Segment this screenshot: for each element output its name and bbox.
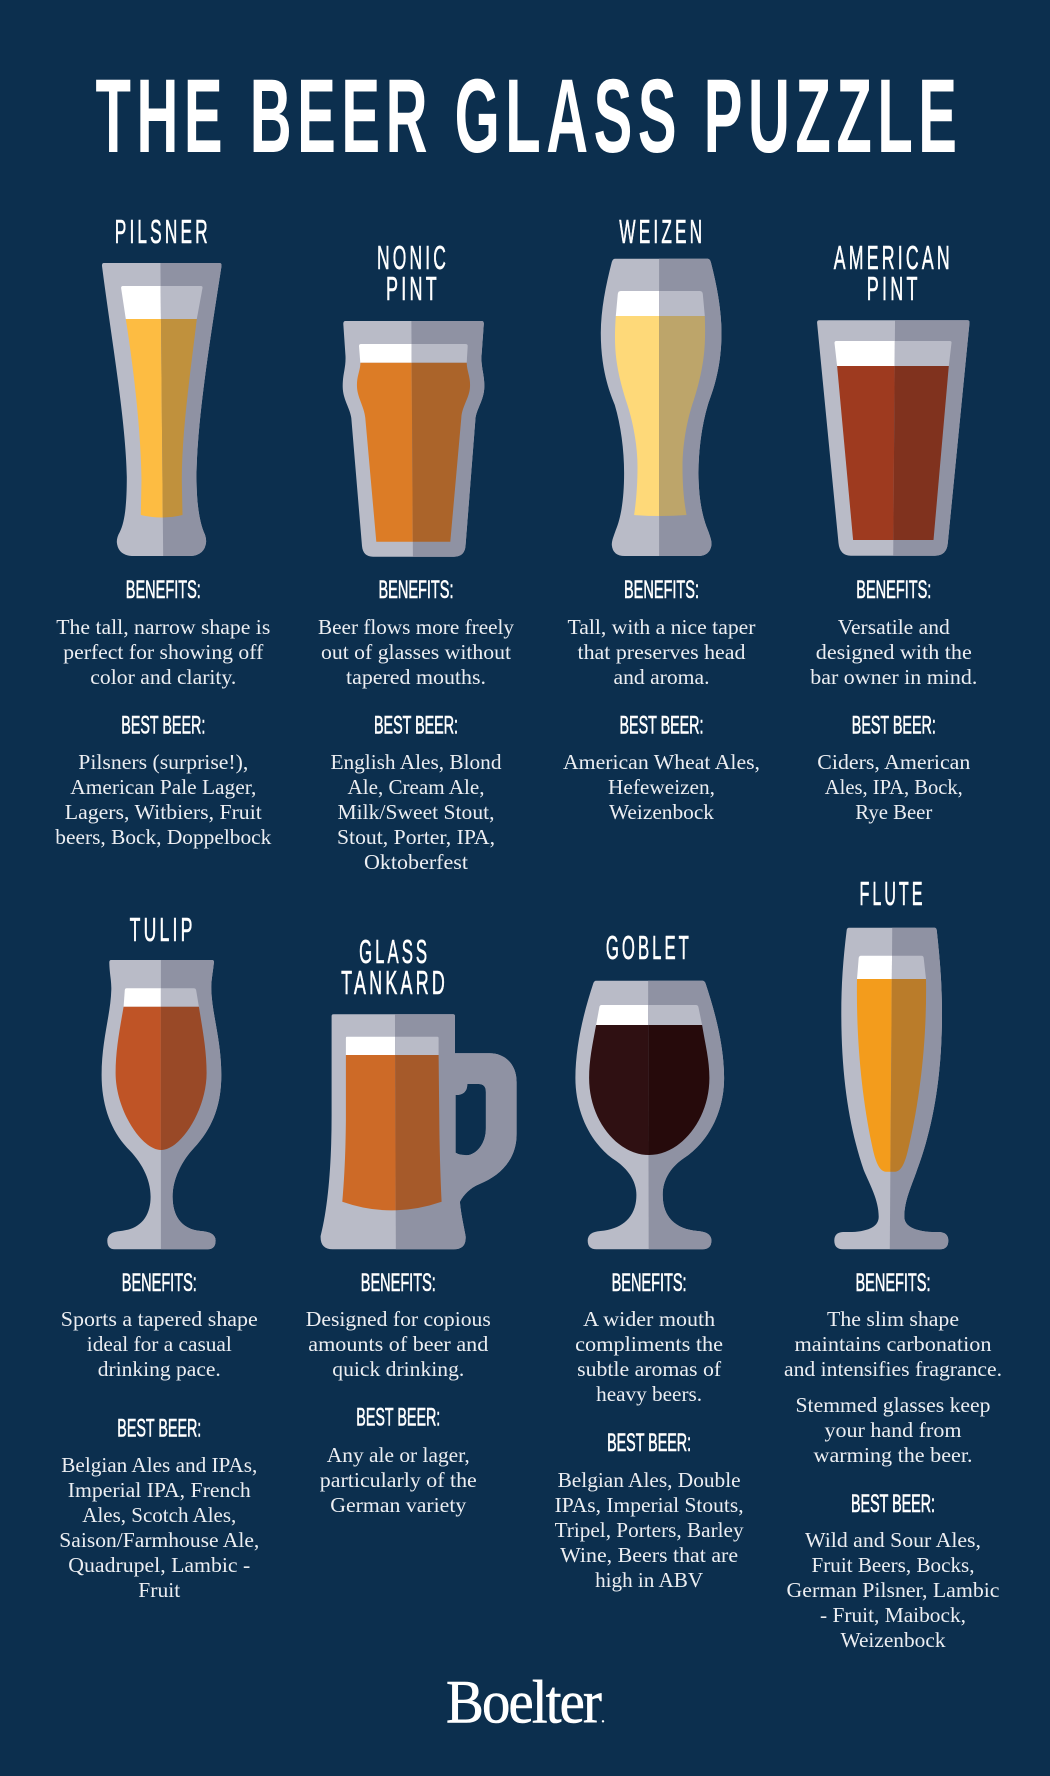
- benefits text: tulip: [61, 1307, 258, 1381]
- best beer text: goblet: [555, 1468, 744, 1592]
- benefits text: flute: maintains carbonation: [794, 1332, 992, 1356]
- benefits label: weizen: BENEFITS:: [624, 576, 699, 604]
- icon: goblet glass: [575, 981, 724, 1249]
- heading: tulip: TULIP: [130, 911, 196, 948]
- benefits text: weizen: Tall, with a nice taper: [568, 615, 756, 639]
- panel: glass tankard: [306, 933, 517, 1517]
- best beer text: american pint: Rye Beer: [855, 800, 932, 824]
- benefits text: flute: [784, 1307, 1002, 1467]
- best beer text: american pint: [817, 750, 971, 824]
- best beer text: pilsner: beers, Bock, Doppelbock: [55, 825, 272, 849]
- heading: american pint: AMERICAN: [834, 239, 953, 276]
- best beer text: nonic pint: Milk/Sweet Stout,: [338, 800, 494, 824]
- best beer text: pilsner: American Pale Lager,: [70, 775, 256, 799]
- best beer text: tulip: Ales, Scotch Ales,: [82, 1503, 236, 1527]
- benefits text: nonic pint: [318, 615, 515, 689]
- best beer text: tulip: Fruit: [138, 1578, 180, 1602]
- panel: tulip: [59, 911, 259, 1602]
- best beer text: flute: German Pilsner, Lambic: [786, 1578, 1000, 1602]
- benefits text: american pint: [810, 615, 977, 689]
- heading: american pint: [834, 239, 953, 307]
- benefits text: pilsner: The tall, narrow shape is: [56, 615, 270, 639]
- icon: tulip glass: [102, 960, 221, 1249]
- best beer text: nonic pint: Stout, Porter, IPA,: [337, 825, 495, 849]
- heading: glass tankard: TANKARD: [341, 964, 448, 1001]
- panel: flute: [784, 875, 1002, 1652]
- best beer label: glass tankard: BEST BEER:: [356, 1404, 440, 1432]
- best beer text: goblet: IPAs, Imperial Stouts,: [555, 1493, 744, 1517]
- benefits text: weizen: that preserves head: [578, 640, 746, 664]
- icon: american pint glass: [817, 320, 970, 556]
- benefits text: american pint: bar owner in mind.: [810, 665, 977, 689]
- icon: glass tankard: [321, 1014, 517, 1249]
- best beer text: goblet: Wine, Beers that are: [560, 1543, 738, 1567]
- benefits text: glass tankard: amounts of beer and: [308, 1332, 489, 1356]
- benefits text: glass tankard: quick drinking.: [332, 1357, 464, 1381]
- best beer label: flute: BEST BEER:: [851, 1490, 935, 1518]
- benefits text: goblet: [575, 1307, 723, 1406]
- best beer text: tulip: Saison/Farmhouse Ale,: [59, 1528, 259, 1552]
- benefits text: goblet: A wider mouth: [583, 1307, 716, 1331]
- benefits text: flute: warming the beer.: [814, 1443, 972, 1467]
- heading: nonic pint: [377, 239, 449, 307]
- heading: nonic pint: NONIC: [377, 239, 449, 276]
- benefits text: tulip: Sports a tapered shape: [61, 1307, 258, 1331]
- benefits text: nonic pint: Beer flows more freely: [318, 615, 515, 639]
- benefits label: tulip: BENEFITS:: [122, 1269, 197, 1297]
- panel: weizen: [563, 213, 760, 824]
- best beer text: goblet: Belgian Ales, Double: [558, 1468, 741, 1492]
- best beer text: weizen: Weizenbock: [609, 800, 714, 824]
- best beer text: weizen: American Wheat Ales,: [563, 750, 760, 774]
- panel: flute: FLUTE: [860, 875, 926, 912]
- best beer label: tulip: BEST BEER:: [117, 1414, 201, 1442]
- best beer text: nonic pint: Ale, Cream Ale,: [348, 775, 484, 799]
- benefits text: weizen: [568, 615, 756, 689]
- benefits label: goblet: BENEFITS:: [612, 1269, 687, 1297]
- benefits text: tulip: ideal for a casual: [87, 1332, 232, 1356]
- panel: nonic pint: [318, 239, 515, 874]
- logo: Boelter: .: [600, 1706, 606, 1728]
- best beer text: glass tankard: [320, 1443, 477, 1517]
- icon: pilsner glass: [102, 263, 222, 556]
- best beer text: tulip: Belgian Ales and IPAs,: [61, 1453, 257, 1477]
- benefits label: nonic pint: BENEFITS:: [378, 576, 454, 604]
- best beer text: american pint: Ciders, American: [817, 750, 971, 774]
- benefits text: goblet: subtle aromas of: [577, 1357, 721, 1381]
- best beer text: flute: Fruit Beers, Bocks,: [812, 1553, 974, 1577]
- panel: american pint: [810, 239, 977, 824]
- best beer text: tulip: Quadrupel, Lambic -: [68, 1553, 250, 1577]
- benefits text: nonic pint: out of glasses without: [321, 640, 511, 664]
- best beer text: pilsner: Lagers, Witbiers, Fruit: [65, 800, 262, 824]
- benefits label: american pint: BENEFITS:: [856, 576, 931, 604]
- benefits text: flute: Stemmed glasses keep: [796, 1393, 990, 1417]
- best beer text: weizen: [563, 750, 760, 824]
- benefits label: flute: BENEFITS:: [856, 1269, 930, 1297]
- icon: flute glass: [834, 928, 948, 1249]
- best beer label: american pint: BEST BEER:: [852, 712, 936, 740]
- best beer text: goblet: Tripel, Porters, Barley: [555, 1518, 744, 1542]
- best beer label: weizen: BEST BEER:: [620, 712, 704, 740]
- best beer text: nonic pint: Oktoberfest: [364, 850, 468, 874]
- benefits text: american pint: Versatile and: [838, 615, 950, 639]
- heading: weizen: WEIZEN: [619, 213, 705, 250]
- icon: nonic pint glass: [343, 321, 484, 557]
- best beer text: glass tankard: Any ale or lager,: [327, 1443, 470, 1467]
- best beer text: goblet: high in ABV: [595, 1568, 703, 1592]
- benefits text: pilsner: [56, 615, 270, 689]
- panel: goblet: [555, 929, 744, 1592]
- best beer text: pilsner: Pilsners (surprise!),: [78, 750, 248, 774]
- benefits text: flute: The slim shape: [827, 1307, 959, 1331]
- best beer label: pilsner: BEST BEER:: [121, 712, 205, 740]
- best beer text: glass tankard: German variety: [330, 1493, 467, 1517]
- best beer text: pilsner: [55, 750, 272, 849]
- best beer label: goblet: BEST BEER:: [607, 1429, 691, 1457]
- benefits text: glass tankard: Designed for copious: [306, 1307, 491, 1331]
- best beer text: nonic pint: English Ales, Blond: [330, 750, 502, 774]
- benefits text: goblet: heavy beers.: [596, 1382, 702, 1406]
- benefits text: flute: and intensifies fragrance.: [784, 1357, 1002, 1381]
- icon: weizen glass: [601, 259, 722, 556]
- best beer text: tulip: [59, 1453, 259, 1602]
- benefits text: goblet: compliments the: [575, 1332, 723, 1356]
- benefits text: flute: your hand from: [824, 1418, 962, 1442]
- best beer text: glass tankard: particularly of the: [320, 1468, 477, 1492]
- best beer text: flute: Weizenbock: [840, 1628, 946, 1652]
- benefits text: weizen: and aroma.: [614, 665, 710, 689]
- benefits label: pilsner: BENEFITS:: [126, 576, 201, 604]
- best beer label: nonic pint: BEST BEER:: [374, 712, 458, 740]
- benefits text: pilsner: perfect for showing off: [63, 640, 263, 664]
- heading: glass tankard: [341, 933, 448, 1001]
- heading: nonic pint: PINT: [386, 270, 440, 307]
- benefits text: pilsner: color and clarity.: [90, 665, 236, 689]
- benefits text: glass tankard: [306, 1307, 491, 1381]
- benefits text: american pint: designed with the: [816, 640, 972, 664]
- best beer text: flute: [786, 1528, 1000, 1652]
- heading: american pint: PINT: [867, 270, 921, 307]
- best beer text: nonic pint: [330, 750, 502, 874]
- logo: Boelter: Boelter: [446, 1670, 602, 1737]
- heading: goblet: GOBLET: [606, 929, 692, 966]
- benefits text: tulip: drinking pace.: [98, 1357, 221, 1381]
- heading: pilsner: PILSNER: [115, 213, 211, 250]
- best beer text: flute: - Fruit, Maibock,: [820, 1603, 966, 1627]
- panel: pilsner: [55, 213, 272, 849]
- benefits label: glass tankard: BENEFITS:: [361, 1269, 436, 1297]
- best beer text: flute: Wild and Sour Ales,: [805, 1528, 981, 1552]
- best beer text: weizen: Hefeweizen,: [608, 775, 715, 799]
- heading: glass tankard: GLASS: [359, 933, 430, 970]
- best beer text: american pint: Ales, IPA, Bock,: [825, 775, 963, 799]
- best beer text: tulip: Imperial IPA, French: [68, 1478, 251, 1502]
- benefits text: nonic pint: tapered mouths.: [346, 665, 486, 689]
